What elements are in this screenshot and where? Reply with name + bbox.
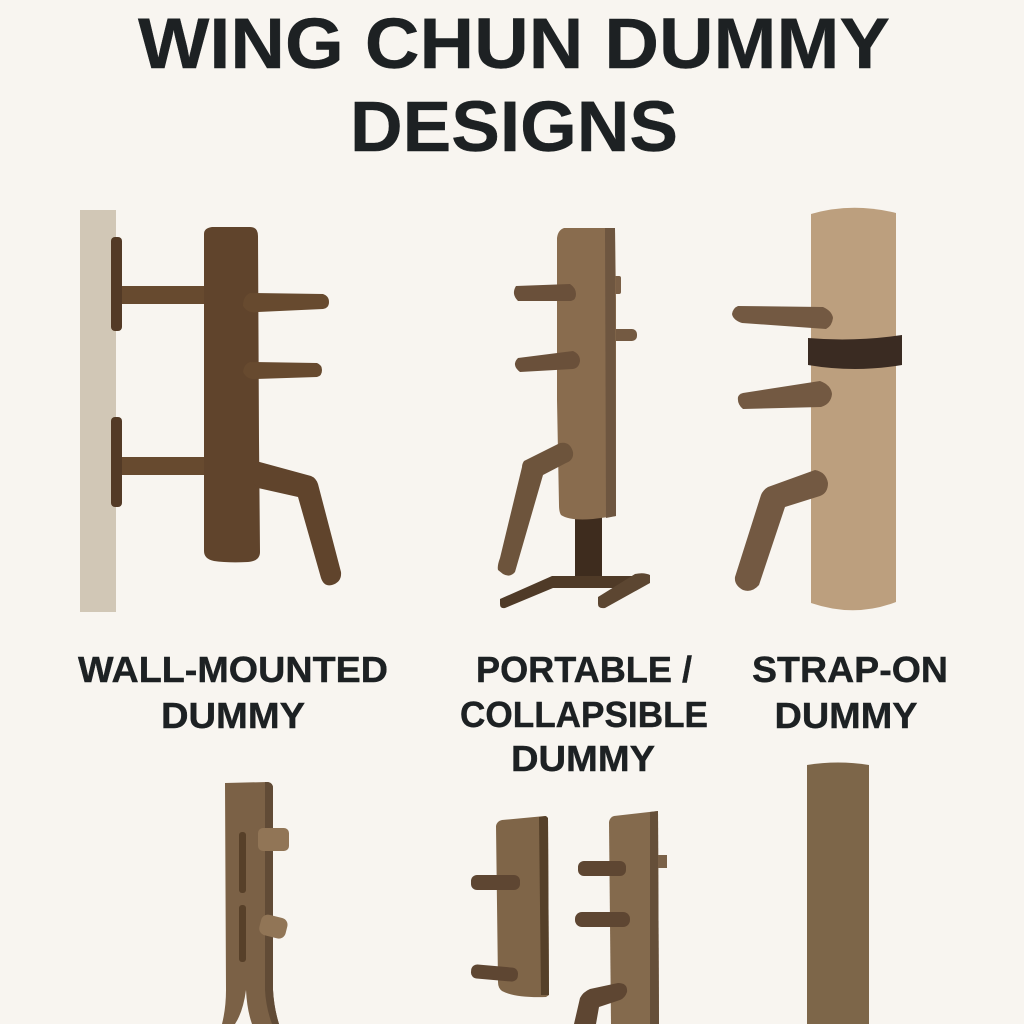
strap	[808, 335, 902, 369]
left panel	[496, 816, 549, 997]
right panel	[609, 811, 659, 1024]
upper arm	[732, 306, 833, 329]
trunk	[557, 228, 616, 520]
upper mounting arm	[120, 286, 206, 304]
upper arm	[514, 284, 576, 301]
right back peg	[658, 855, 667, 868]
stand post	[575, 516, 602, 578]
illustration: wall-mounted dummy	[80, 210, 341, 612]
back upper peg	[610, 276, 621, 294]
upper wall bracket	[111, 237, 122, 331]
illustration: bottom slim dummy	[222, 782, 289, 1024]
slim trunk with forked base	[222, 782, 279, 1024]
left upper peg	[471, 875, 520, 890]
leg	[498, 443, 573, 576]
illustration: bottom plain post	[807, 762, 869, 1024]
right middle peg	[575, 912, 630, 927]
left panel edge	[539, 816, 549, 995]
slot lower	[239, 905, 246, 962]
lower peg	[258, 913, 289, 940]
leg	[735, 470, 828, 591]
label: portable / collapsible dummy: DUMMY	[511, 738, 655, 779]
title: WING CHUN DUMMY	[138, 5, 890, 84]
trunk side face	[605, 228, 616, 518]
wall	[80, 210, 116, 612]
post	[811, 208, 896, 610]
label: portable / collapsible dummy: PORTABLE /	[476, 649, 692, 690]
label: strap-on dummy: DUMMY	[774, 695, 918, 736]
label: wall-mounted dummy	[78, 649, 388, 736]
right upper peg	[578, 861, 626, 876]
label: portable / collapsible dummy	[460, 649, 708, 779]
leg	[253, 461, 341, 585]
lower wall bracket	[111, 417, 122, 507]
upper arm	[243, 293, 329, 312]
slot upper	[239, 832, 246, 893]
middle arm	[738, 381, 832, 409]
stand base right	[598, 573, 650, 608]
left lower peg	[470, 964, 519, 982]
middle arm	[243, 362, 322, 379]
label: wall-mounted dummy: DUMMY	[161, 695, 305, 736]
illustration: strap-on dummy	[732, 208, 902, 610]
upper peg	[258, 828, 289, 851]
label: strap-on dummy	[752, 649, 948, 736]
title	[138, 5, 890, 167]
label: wall-mounted dummy: WALL-MOUNTED	[78, 649, 388, 690]
lower mounting arm	[120, 457, 206, 475]
back lower peg	[610, 329, 637, 341]
illustration: portable / collapsible dummy	[498, 228, 650, 608]
trunk side shade	[265, 782, 279, 1024]
illustration: bottom two-piece dummy	[470, 811, 667, 1024]
middle arm	[515, 351, 580, 372]
label: portable / collapsible dummy: COLLAPSIBLE	[460, 694, 708, 735]
stand base left	[500, 576, 634, 608]
right leg	[574, 983, 627, 1024]
label: strap-on dummy: STRAP-ON	[752, 649, 948, 690]
title: DESIGNS	[350, 88, 678, 167]
trunk	[204, 227, 260, 562]
right panel edge	[650, 811, 659, 1024]
